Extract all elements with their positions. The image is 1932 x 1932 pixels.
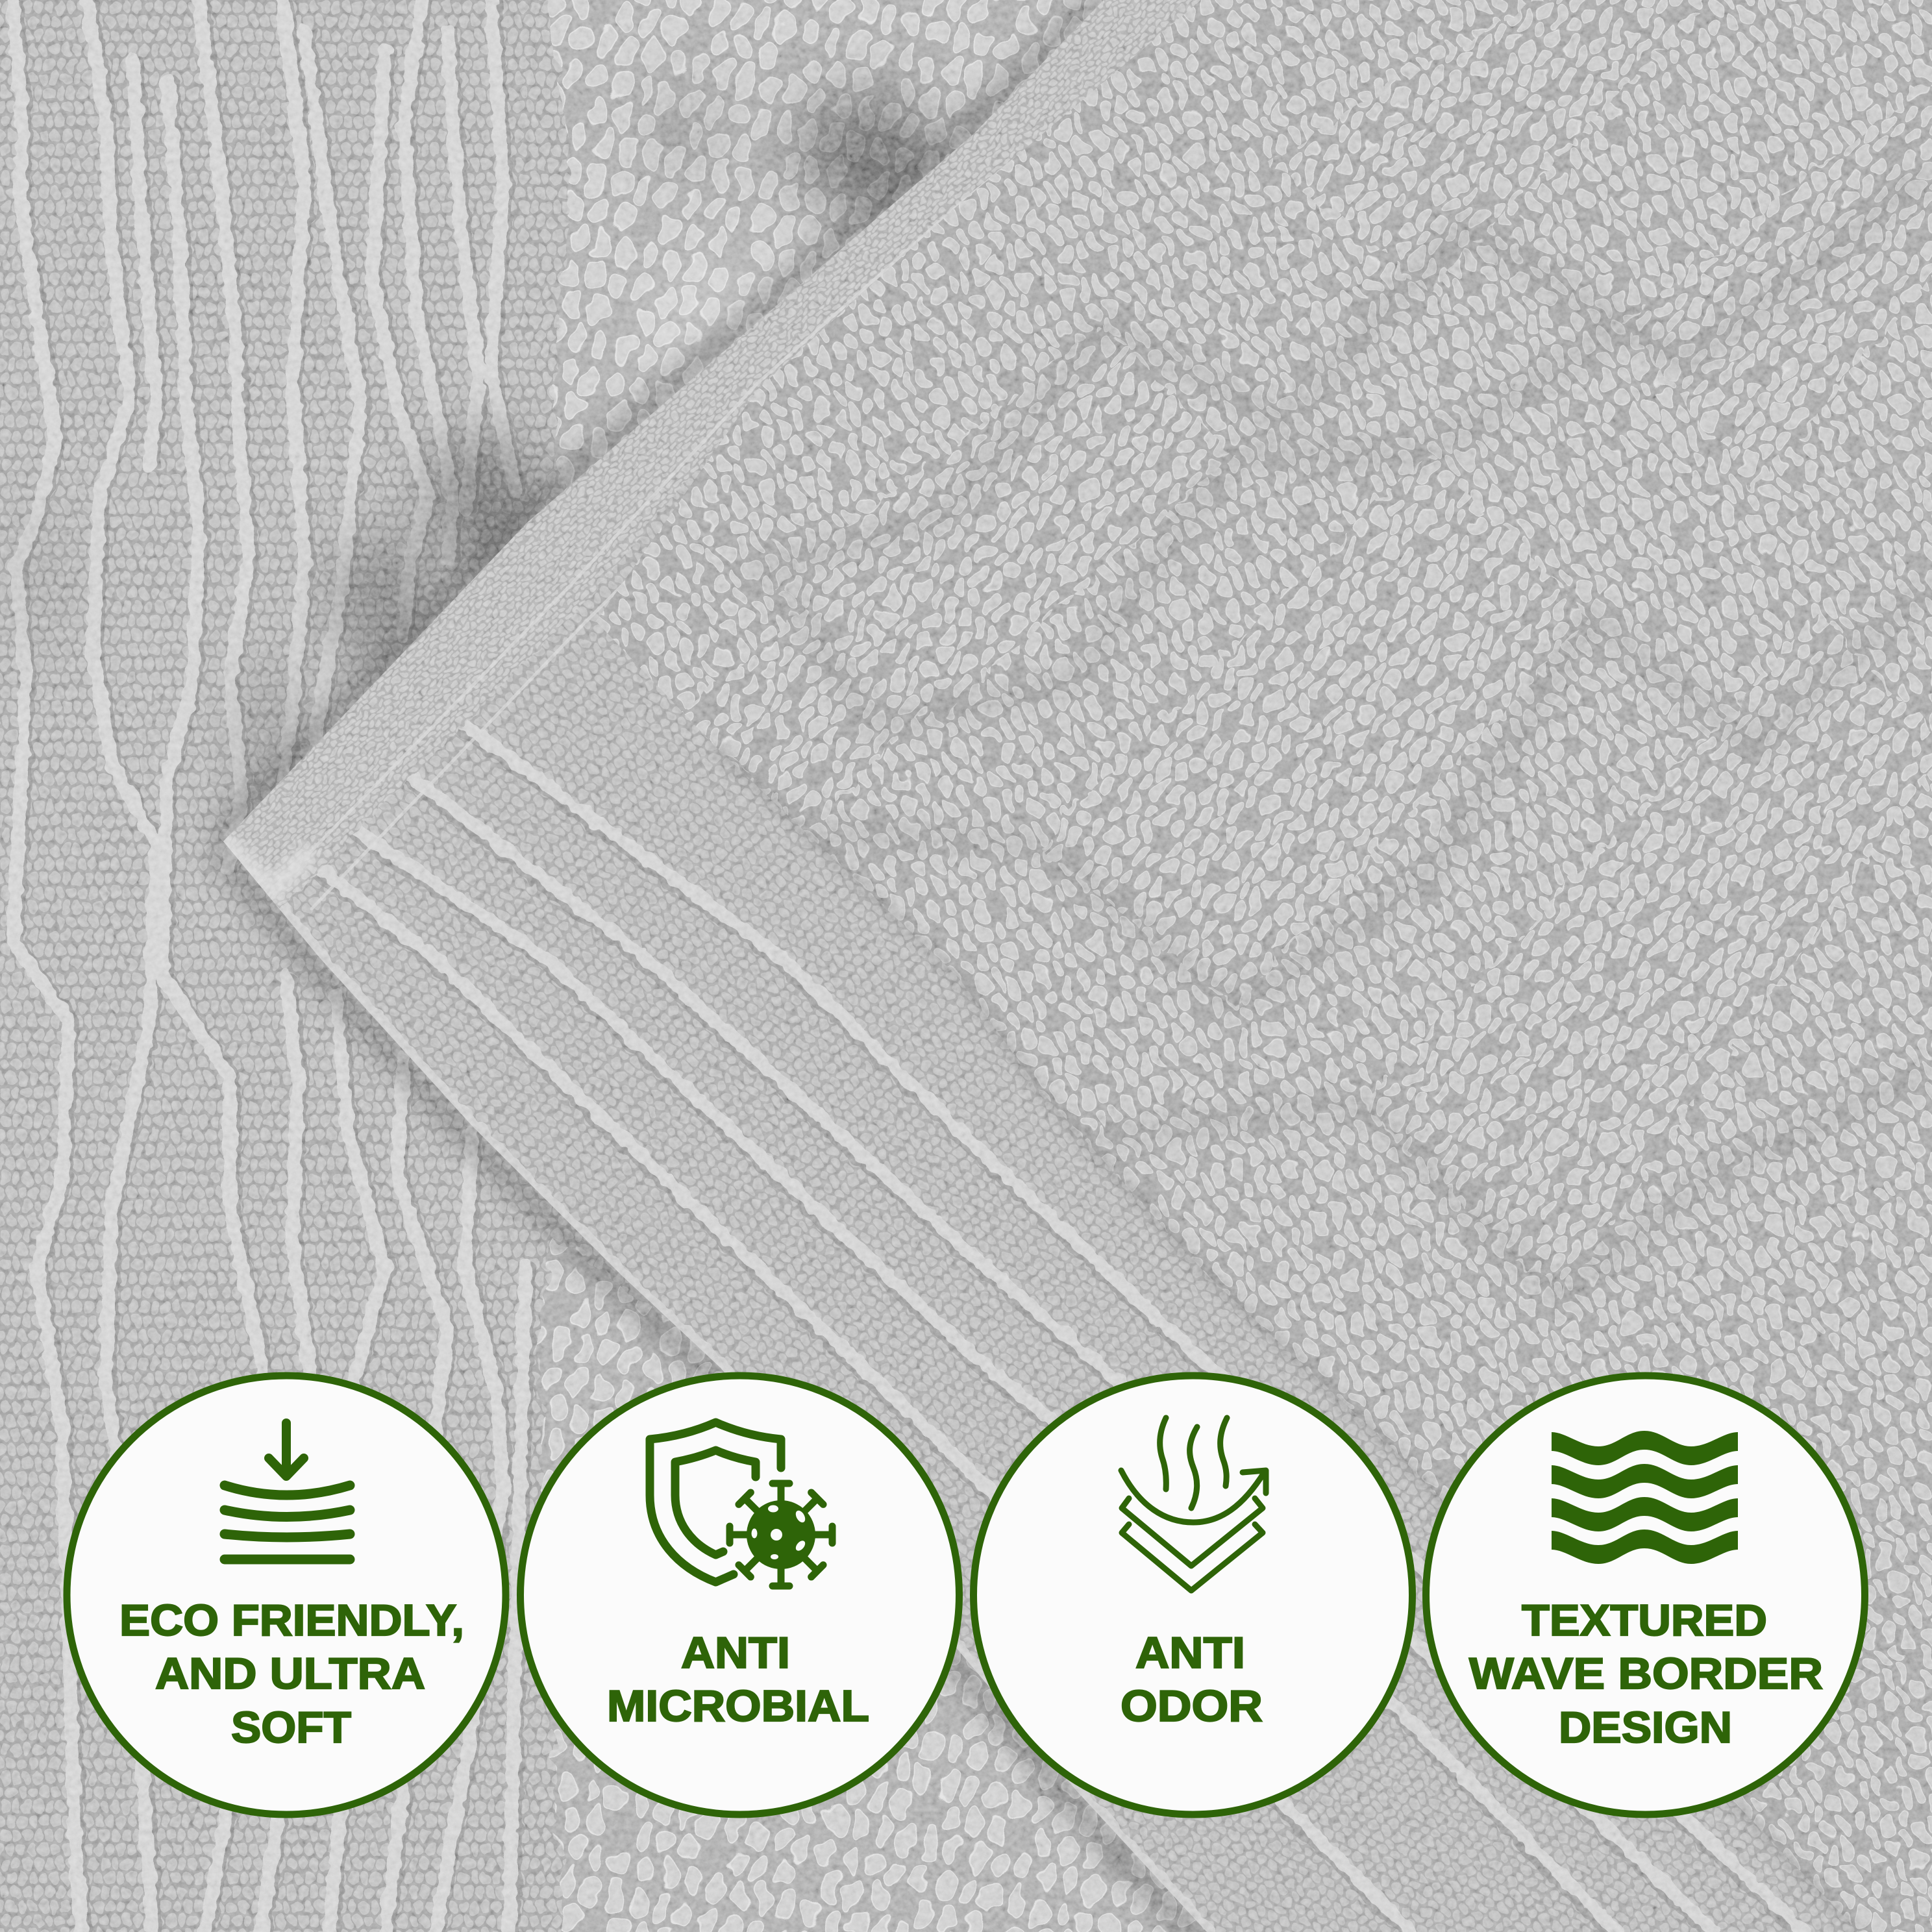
label: TEXTURED [1522,1596,1767,1645]
label: ECO FRIENDLY, [119,1596,464,1645]
label: DESIGN [1559,1703,1732,1752]
label: ANTI [1135,1628,1245,1678]
badge: anti microbial [521,1376,960,1814]
hem highlight and stitching [223,19,1188,909]
terry pile main body [454,0,1932,1932]
label: ODOR [1121,1681,1263,1731]
wavy vertical ribs [13,0,533,1932]
terry pile above the folded towel [545,0,1169,539]
icon: arrow pressing soft layers [225,1423,350,1559]
badge: anti odor [974,1376,1413,1814]
chevron ridges in terry pile [747,169,1932,1298]
hem along top edge [223,0,1233,909]
drop shadow of folded towel [217,0,1201,1932]
badge: textured wave border design [1426,1376,1864,1814]
badge circle [1426,1376,1864,1814]
label: MICROBIAL [607,1681,869,1731]
label: ANTI [681,1628,790,1678]
terry pile below the folded towel [539,1233,1233,1932]
woven ribbed towel underneath [0,0,630,1932]
label [607,1628,869,1731]
shadow under terry edge [714,745,1859,1932]
badge circle [521,1376,960,1814]
icon: odor steam and fabric layers [1121,1418,1266,1591]
label: AND ULTRA [155,1649,425,1698]
label [1469,1596,1823,1752]
badge: eco friendly and ultra soft [67,1376,506,1814]
label [1121,1628,1263,1731]
label [119,1596,464,1752]
label: WAVE BORDER [1469,1649,1823,1698]
badge circle [67,1376,506,1814]
ribs parallel to lower edge [223,708,1805,1932]
icon: shield and virus [650,1422,832,1586]
icon: four waves [1552,1431,1738,1564]
badge circle [974,1376,1413,1814]
label: SOFT [231,1703,351,1752]
shadows on underlying towel [13,84,938,837]
